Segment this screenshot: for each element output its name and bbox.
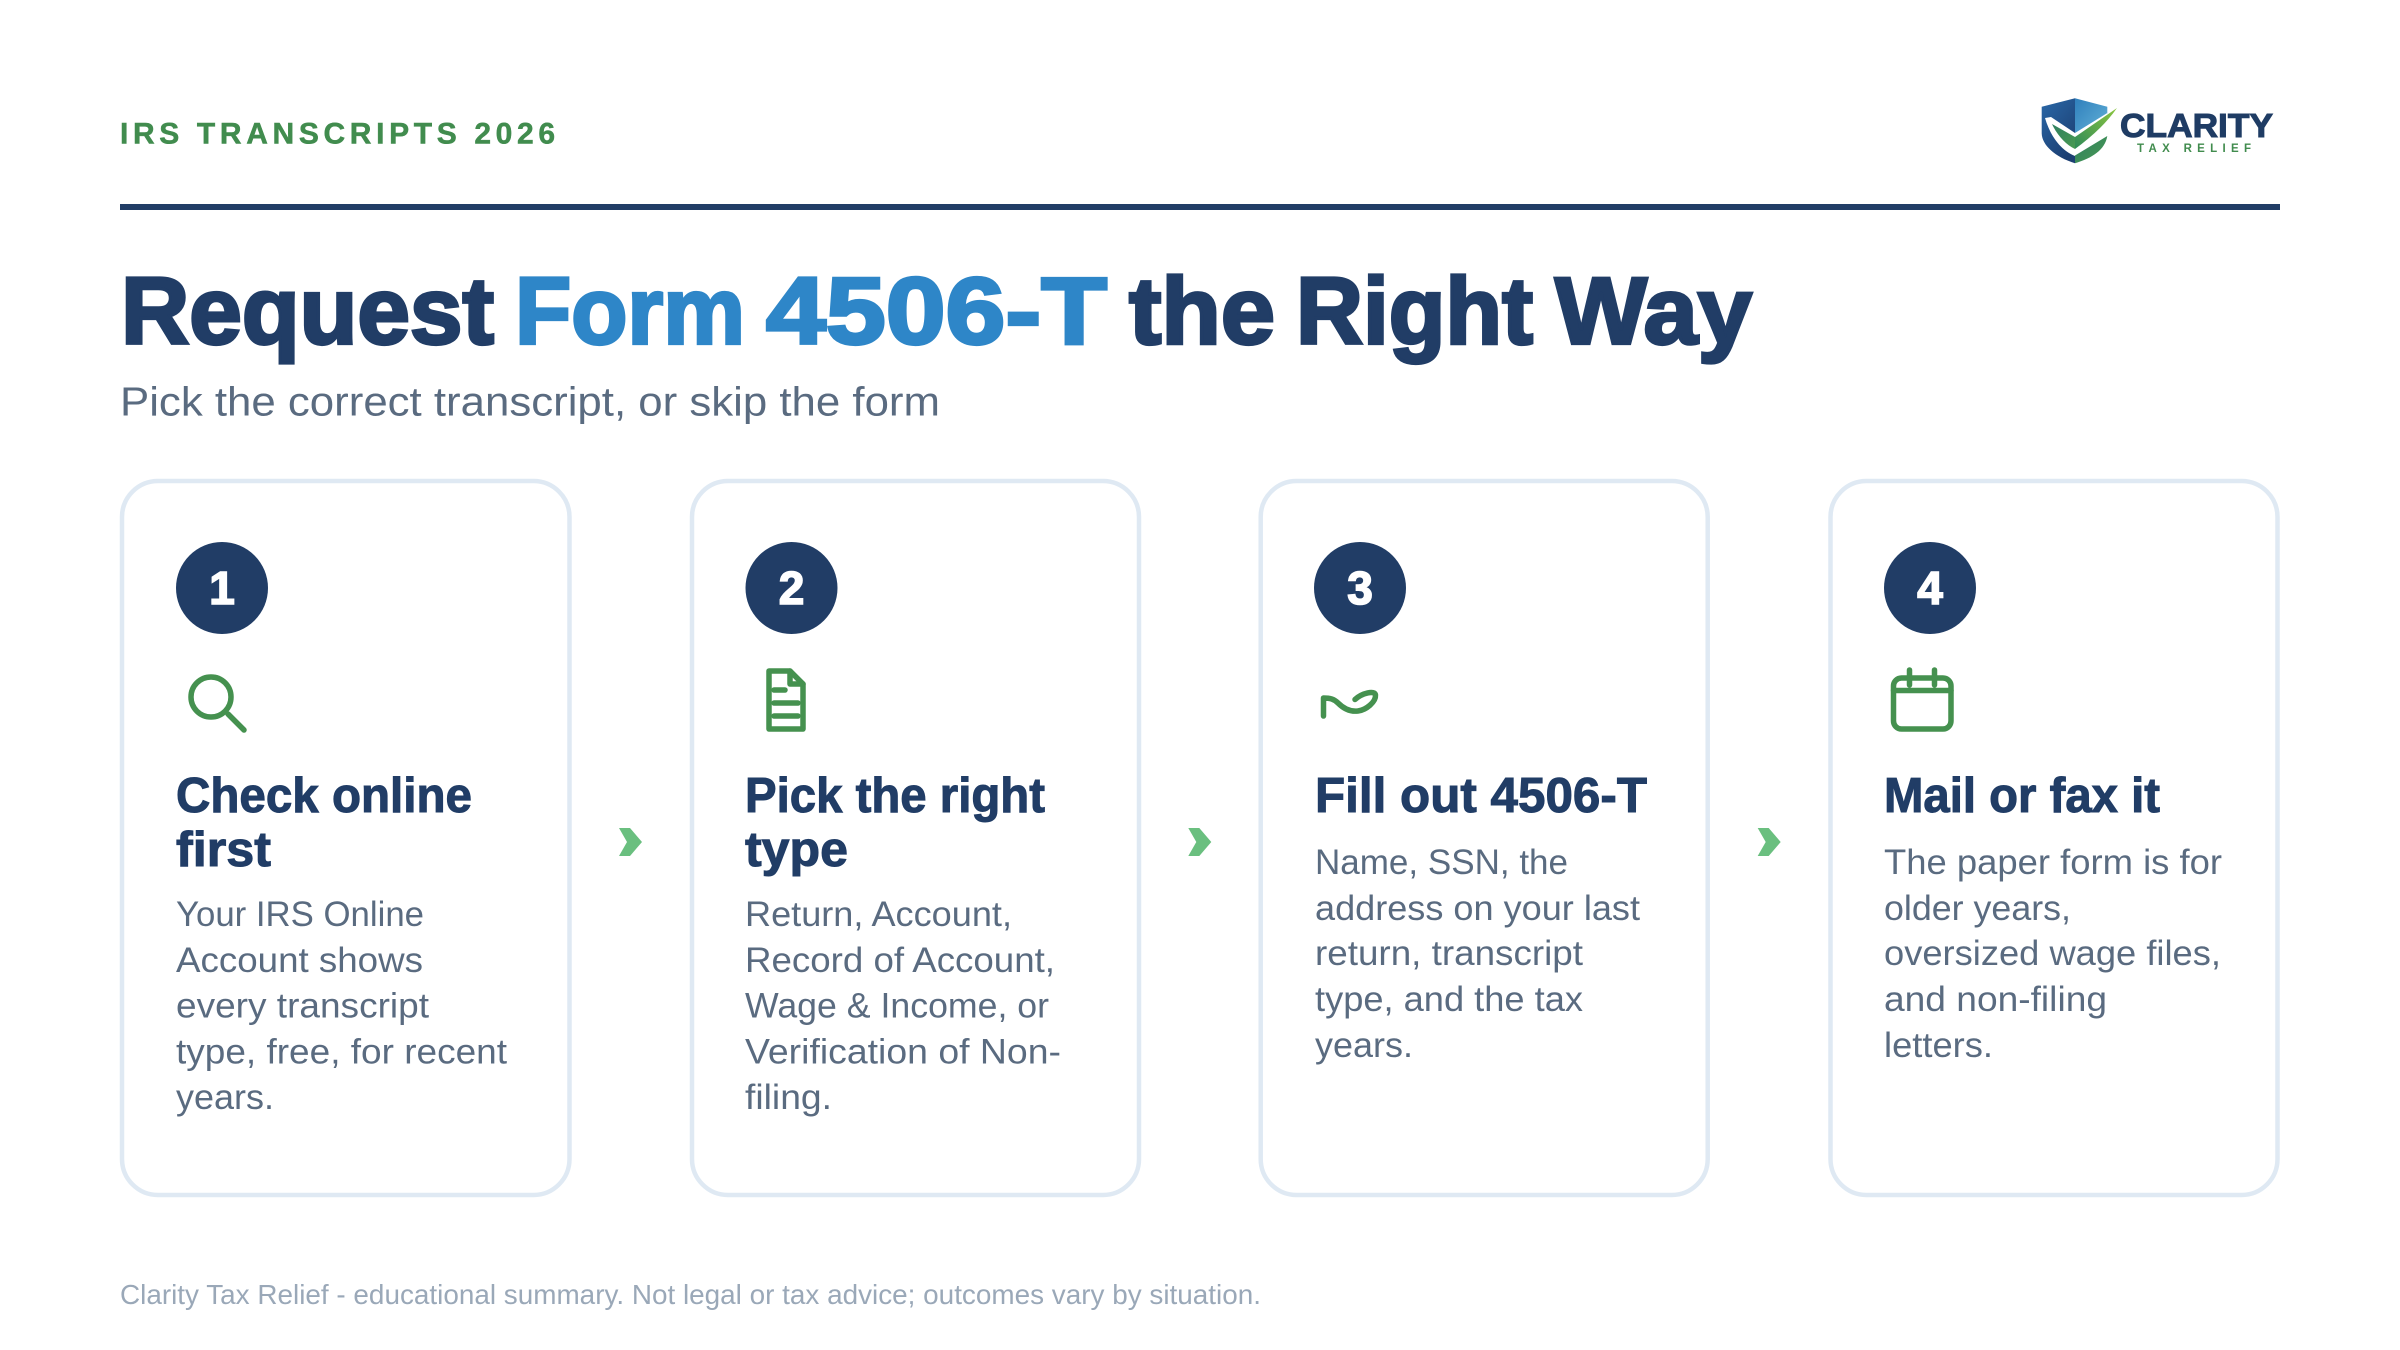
- body text: [176, 894, 507, 1117]
- heading: Check online: [176, 769, 472, 823]
- title: Form: [515, 258, 745, 364]
- body text: filing.: [745, 1077, 832, 1117]
- body text: Account shows: [176, 940, 423, 980]
- icon: calendar: [1894, 670, 1951, 729]
- body text: type, and the tax: [1315, 979, 1583, 1019]
- body text: every transcript: [176, 986, 429, 1026]
- step number 1: [176, 542, 268, 634]
- heading: [745, 769, 1045, 877]
- logo tagline: TAX RELIEF: [2137, 143, 2251, 155]
- title: the: [1129, 258, 1275, 364]
- heading: Fill out 4506-T: [1315, 769, 1647, 823]
- body text: address on your last: [1315, 888, 1640, 928]
- step number 3: [1314, 542, 1406, 634]
- step number 1: 1: [209, 562, 235, 614]
- step number 2: [746, 542, 838, 634]
- eyebrow label: IRS TRANSCRIPTS 2026: [120, 118, 555, 150]
- body text: Return, Account,: [745, 894, 1012, 934]
- arrow 3 to 4: [1758, 828, 1781, 856]
- arrow 1 to 2: [619, 828, 642, 856]
- heading: type: [745, 823, 848, 877]
- body text: Verification of Non-: [745, 1032, 1061, 1072]
- body text: years.: [176, 1077, 274, 1117]
- body text: years.: [1315, 1025, 1413, 1065]
- body text: [745, 894, 1061, 1117]
- step number 3: 3: [1347, 562, 1373, 614]
- footer disclaimer: Clarity Tax Relief - educational summary. Not legal or tax advice; outcomes vary by situation.: [120, 1279, 1261, 1310]
- step number 2: 2: [779, 562, 804, 614]
- step number 4: 4: [1917, 562, 1943, 614]
- panel: step 3: [1261, 481, 1708, 1195]
- body text: older years,: [1884, 888, 2071, 928]
- title: Request: [121, 258, 494, 364]
- panel: step 4: [1830, 481, 2278, 1195]
- icon: document: [769, 671, 803, 729]
- body text: Record of Account,: [745, 940, 1055, 980]
- panel: step 2: [692, 481, 1139, 1195]
- heading: first: [176, 823, 271, 877]
- title: [121, 258, 1752, 364]
- title: 4506-T: [766, 258, 1107, 364]
- step number 4: [1884, 542, 1976, 634]
- icon: magnifying glass: [191, 677, 244, 730]
- icon: shield with check: [2042, 98, 2117, 163]
- body text: Wage & Income, or: [745, 986, 1049, 1026]
- subtitle: Pick the correct transcript, or skip the form: [120, 378, 940, 424]
- heading: Pick the right: [745, 769, 1045, 823]
- body text: and non-filing: [1884, 979, 2107, 1019]
- panel: step 1: [122, 481, 570, 1195]
- body text: type, free, for recent: [176, 1032, 507, 1072]
- body text: Your IRS Online: [176, 894, 424, 934]
- body text: return, transcript: [1315, 933, 1583, 973]
- heading: [176, 769, 472, 877]
- heading: Mail or fax it: [1884, 769, 2160, 823]
- body text: oversized wage files,: [1884, 933, 2221, 973]
- icon: signature: [1324, 692, 1376, 716]
- arrow 2 to 3: [1188, 828, 1211, 856]
- body text: letters.: [1884, 1025, 1993, 1065]
- title: Right: [1296, 258, 1533, 364]
- logo wordmark: CLARITY: [2120, 107, 2273, 144]
- header rule: [120, 204, 2280, 210]
- logo: Clarity Tax Relief: [2042, 98, 2273, 163]
- body text: Name, SSN, the: [1315, 842, 1568, 882]
- body text: [1315, 842, 1640, 1065]
- body text: The paper form is for: [1884, 842, 2222, 882]
- title: Way: [1555, 258, 1752, 364]
- body text: [1884, 842, 2222, 1065]
